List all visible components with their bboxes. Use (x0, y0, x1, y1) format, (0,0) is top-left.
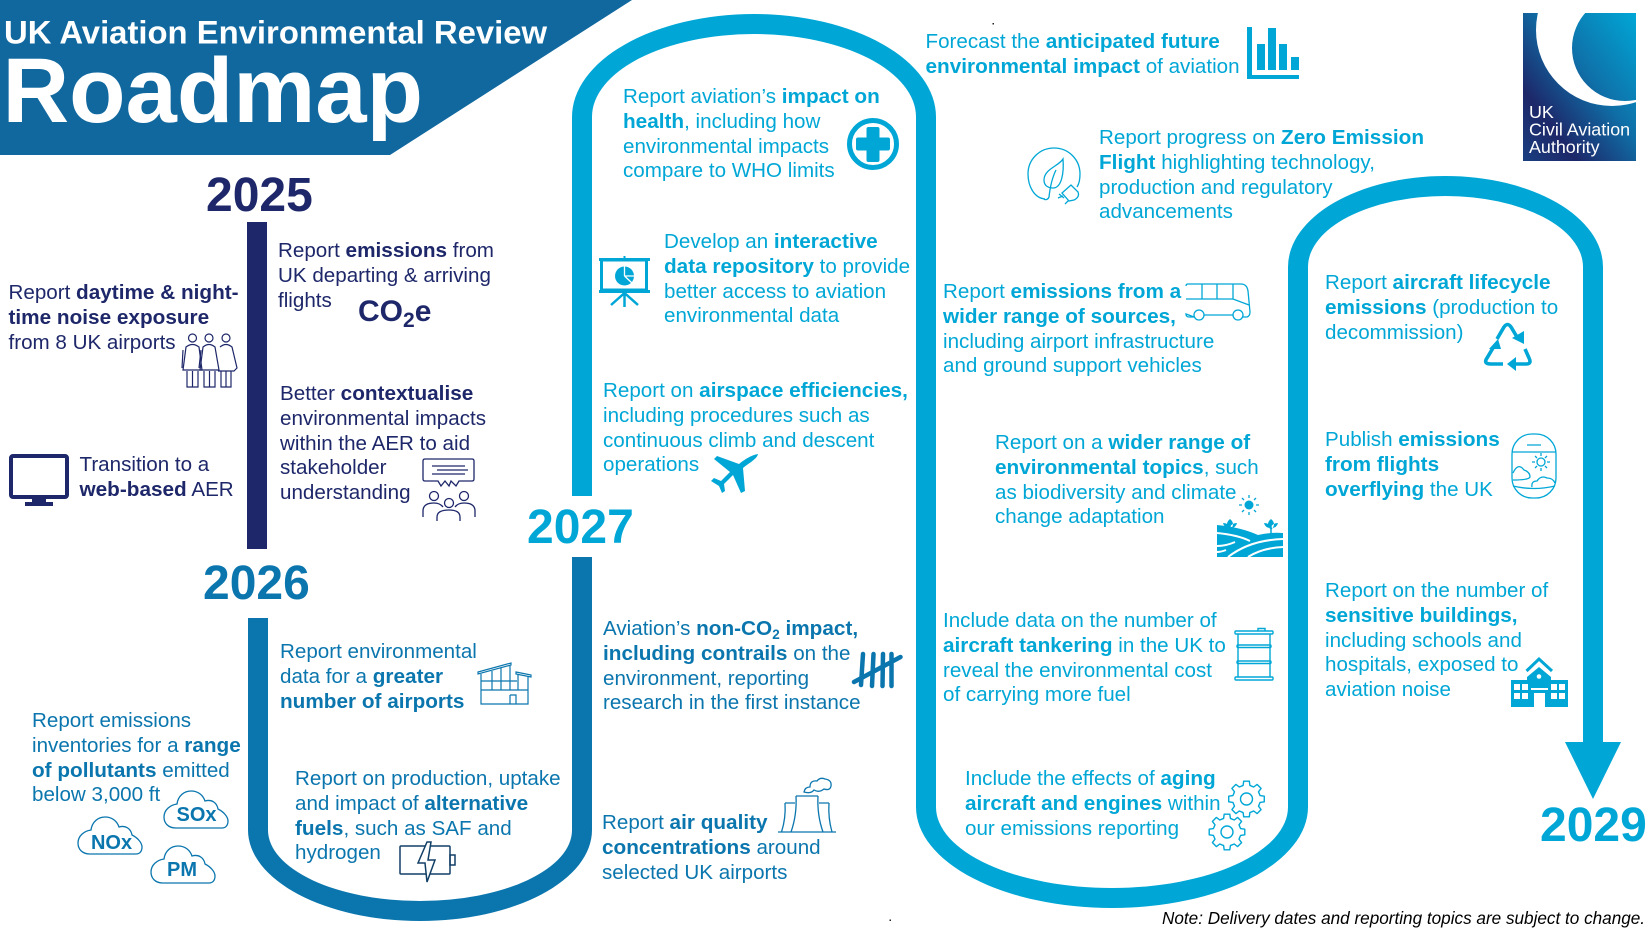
item: zero emission flight: Flight highlighting technology, (1099, 151, 1375, 174)
item: aircraft tankering: reveal the environmental cost (943, 659, 1212, 682)
item: aircraft tankering (943, 609, 1273, 706)
item: web-based AER: Transition to a (80, 453, 210, 476)
item: contextualise impacts: understanding (280, 481, 411, 504)
item: airspace efficiencies: continuous climb and descent (603, 429, 875, 452)
item: aircraft lifecycle: emissions (production to (1325, 296, 1558, 319)
item: air quality: selected UK airports (602, 861, 787, 884)
icon: plane (711, 454, 758, 493)
icon: tally marks (854, 654, 900, 686)
year 2026: 2026 (203, 557, 310, 610)
item: alternative fuels: fuels, such as SAF and (295, 817, 512, 840)
item: non-CO2 impact: Aviation’s non-CO (603, 617, 772, 640)
item: alternative fuels: Report on production, uptake (295, 767, 561, 790)
item: contextualise impacts: Better contextualise (280, 382, 473, 405)
item: airspace efficiencies (603, 379, 908, 493)
item: airspace efficiencies: Report on airspace efficiencies, (603, 379, 908, 402)
icon: battery (400, 842, 455, 882)
item: interactive data repository: better access to aviation (664, 280, 886, 303)
item: aircraft lifecycle: decommission) (1325, 321, 1463, 344)
item: zero emission flight: Report progress on Zero Emission (1099, 126, 1424, 149)
icon: medical cross (850, 120, 896, 168)
item: non-CO2 impact: research in the first instance (603, 691, 861, 714)
item: forecast future impact (926, 27, 1299, 79)
logo: UK Civil Aviation Authority: Civil Aviation (1529, 120, 1630, 140)
item: interactive data repository: data repository to provide (664, 255, 910, 278)
item: emissions from UK flights: UK departing & arriving (278, 264, 491, 287)
stray mark bottom (890, 920, 891, 921)
item: non-CO2 impact: including contrails on the (603, 642, 850, 665)
icon: bus (1186, 284, 1250, 320)
year 2029: 2029 (1540, 799, 1647, 852)
item: wider environmental topics: Report on a wider range of (995, 431, 1250, 454)
item: airspace efficiencies: operations (603, 453, 699, 476)
logo: UK Civil Aviation Authority: Authority (1529, 137, 1600, 157)
item: impact on health: health, including how (623, 110, 820, 133)
item: wider range of sources: Report emissions from a (943, 280, 1182, 303)
item: overflying flights: overflying the UK (1325, 478, 1493, 501)
item: air quality: Report air quality (602, 811, 768, 834)
item: sensitive buildings: Report on the number of (1325, 579, 1549, 602)
item: wider range of sources: and ground support vehicles (943, 354, 1202, 377)
icon: CO2e: e (415, 295, 431, 328)
item: range of pollutants: of pollutants emitted (32, 759, 230, 782)
icon: airport building (478, 663, 531, 704)
item: non-CO2 impact: 2 (772, 627, 780, 642)
item: forecast future impact: Forecast the anticipated future (926, 30, 1220, 53)
item: wider environmental topics (995, 431, 1283, 557)
header banner (0, 0, 632, 155)
item: air quality: concentrations around (602, 836, 821, 859)
item: aircraft tankering: aircraft tankering in the UK to (943, 634, 1226, 657)
item: web-based AER: web-based AER (78, 478, 234, 501)
item: range of pollutants (32, 709, 241, 883)
item: greater number of airports (280, 640, 531, 713)
item: overflying flights (1325, 428, 1556, 501)
item: range of pollutants: inventories for a range (32, 734, 241, 757)
item: contextualise impacts (279, 382, 486, 521)
item: noise exposure: from 8 UK airports (8, 331, 176, 354)
item: non-CO2 impact: impact, (780, 617, 858, 640)
item: wider environmental topics: environmental topics, such (995, 456, 1259, 479)
year 2025: 2025 (206, 169, 313, 222)
icon: CO2e: CO (358, 295, 403, 328)
item: aircraft lifecycle: Report aircraft lifecycle (1325, 271, 1551, 294)
item: aircraft tankering: of carrying more fuel (943, 683, 1131, 706)
item: non-CO2 impact (603, 617, 900, 714)
item: greater number of airports: number of airports (280, 690, 464, 713)
item: overflying flights: Publish emissions (1325, 428, 1500, 451)
item: alternative fuels: and impact of alternative (295, 792, 528, 815)
icon: aircraft window (1512, 434, 1556, 498)
item: noise exposure: Report daytime & night- (8, 281, 239, 304)
item: interactive data repository: Develop an interactive (664, 230, 878, 253)
icon: leaf and plug (1028, 148, 1080, 204)
icon: gears (1209, 781, 1264, 850)
item: impact on health: Report aviation’s impact on (623, 85, 880, 108)
icon: cloud NOx (78, 817, 142, 854)
icon: cloud PM: PM (167, 859, 197, 881)
item: sensitive buildings (1325, 579, 1568, 707)
timeline bar 2025 (247, 222, 267, 549)
item: emissions from UK flights: Report emissions from (278, 239, 494, 262)
item: aging aircraft: aircraft and engines within (965, 792, 1221, 815)
item: zero emission flight: advancements (1099, 200, 1233, 223)
item: impact on health (623, 85, 896, 182)
icon: cloud PM (151, 846, 215, 883)
footnote: Note: Delivery dates and reporting topics are subject to change. (1162, 908, 1645, 928)
icon: recycle arrows (1486, 324, 1530, 371)
item: zero emission flight (1028, 126, 1424, 223)
icon: cloud SOx (164, 791, 228, 828)
item: range of pollutants: Report emissions (32, 709, 191, 732)
item: emissions from UK flights (278, 239, 494, 332)
item: wider environmental topics: change adaptation (995, 505, 1164, 528)
item: sensitive buildings: including schools and (1325, 629, 1522, 652)
timeline path 2027 to 2029 with arrow (572, 14, 1621, 908)
title: UK Aviation Environmental Review: UK Aviation Environmental Review (4, 14, 547, 50)
item: non-CO2 impact: environment, reporting (603, 667, 809, 690)
item: airspace efficiencies: including procedures such as (603, 404, 870, 427)
item: contextualise impacts: stakeholder (280, 456, 387, 479)
item: aging aircraft: Include the effects of aging (965, 767, 1216, 790)
item: alternative fuels: hydrogen (295, 841, 381, 864)
item: greater number of airports: Report environmental (280, 640, 477, 663)
item: air quality (602, 778, 836, 884)
icon: cloud SOx: SOx (176, 804, 217, 826)
item: wider range of sources: including airport infrastructure (943, 330, 1214, 353)
icon: presentation board (599, 256, 650, 307)
item: greater number of airports: data for a greater (280, 665, 443, 688)
item: interactive data repository: environmental data (664, 304, 840, 327)
item: contextualise impacts: environmental impacts (280, 407, 486, 430)
item: contextualise impacts: within the AER to aid (279, 432, 470, 455)
icon: CO2e: 2 (403, 309, 415, 332)
item: range of pollutants: below 3,000 ft (32, 783, 161, 806)
title: Roadmap: Roadmap (2, 38, 423, 142)
icon: cloud NOx: NOx (91, 832, 132, 854)
item: interactive data repository (599, 230, 910, 327)
item: impact on health: environmental impacts (623, 135, 829, 158)
item: aircraft lifecycle (1325, 271, 1558, 371)
item: emissions from UK flights: flights (278, 289, 332, 312)
icon: bar chart (1247, 27, 1299, 79)
icon: farm fields and sun (1217, 495, 1283, 557)
icon: cooling towers (778, 778, 836, 832)
logo: UK Civil Aviation Authority (1523, 13, 1636, 161)
item: noise exposure: time noise exposure (8, 306, 209, 329)
item: impact on health: compare to WHO limits (623, 159, 835, 182)
item: wider range of sources (942, 280, 1250, 377)
icon: speech bubble and people (423, 459, 475, 521)
item: forecast future impact: environmental impact of aviation (926, 55, 1240, 78)
item: aging aircraft: our emissions reporting (965, 817, 1179, 840)
item: aircraft tankering: Include data on the number of (943, 609, 1217, 632)
item: web-based AER (11, 453, 234, 506)
item: wider environmental topics: as biodiversity and climate (995, 481, 1237, 504)
item: sensitive buildings: aviation noise (1325, 678, 1451, 701)
item: wider range of sources: wider range of sources, (942, 305, 1176, 328)
item: sensitive buildings: hospitals, exposed to (1325, 653, 1518, 676)
icon: school (1511, 659, 1568, 707)
timeline path 2026 (248, 557, 592, 921)
icon: monitor (11, 456, 67, 506)
stray mark top (992, 23, 994, 24)
item: noise exposure (8, 281, 239, 387)
year 2027: 2027 (527, 501, 634, 554)
item: aging aircraft (965, 767, 1264, 850)
item: zero emission flight: production and regulatory (1099, 176, 1333, 199)
item: overflying flights: from flights (1325, 453, 1439, 476)
item: sensitive buildings: sensitive buildings, (1325, 604, 1518, 627)
icon: three people (182, 334, 237, 387)
logo: UK Civil Aviation Authority: UK (1529, 102, 1554, 122)
icon: fuel barrel (1235, 628, 1273, 680)
item: alternative fuels (295, 767, 561, 882)
